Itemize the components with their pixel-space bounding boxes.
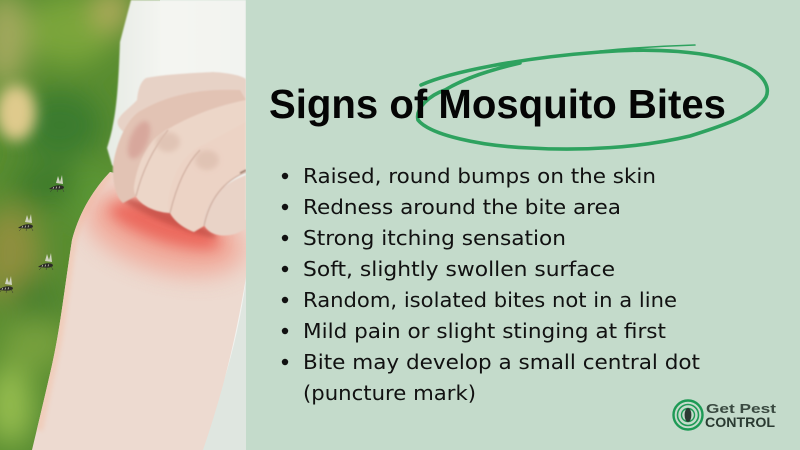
green hand-drawn circle around title words — [418, 45, 767, 149]
logo: Get Pest Control: CONTROL — [705, 414, 775, 430]
bullet item 7: Bite may develop a small central dot — [303, 350, 700, 374]
bullet item 7 — [282, 350, 700, 405]
bullet item 7: (puncture mark) — [303, 381, 476, 405]
mosquitoes — [0, 175, 64, 293]
finger 3 — [168, 122, 246, 232]
bullet item 6: Mild pain or slight stinging at first — [303, 319, 666, 343]
bullet item 3: Strong itching sensation — [303, 226, 566, 250]
white shirt sleeve — [106, 0, 246, 376]
finger 1 — [113, 90, 246, 203]
title: Signs of Mosquito Bites — [269, 81, 726, 127]
bullet list — [282, 164, 700, 405]
photo: arm being scratched with mosquitoes — [0, 0, 254, 450]
finger 2 — [134, 128, 190, 214]
logo wordmark: Get Pest — [706, 402, 777, 416]
bullet item 2: Redness around the bite area — [303, 195, 621, 219]
logo icon: target with bug — [674, 400, 702, 430]
forearm — [32, 172, 254, 450]
logo: Get Pest Control — [674, 400, 777, 430]
back of hand — [117, 72, 246, 132]
bullet item 5: Random, isolated bites not in a line — [303, 288, 677, 312]
blurred green foliage background — [0, 0, 160, 450]
bullet item 4: Soft, slightly swollen surface — [303, 257, 615, 281]
hand with scratching fingers — [113, 72, 246, 236]
finger 4 — [203, 175, 246, 236]
red irritation — [38, 172, 254, 430]
bullet item 1: Raised, round bumps on the skin — [303, 164, 656, 188]
